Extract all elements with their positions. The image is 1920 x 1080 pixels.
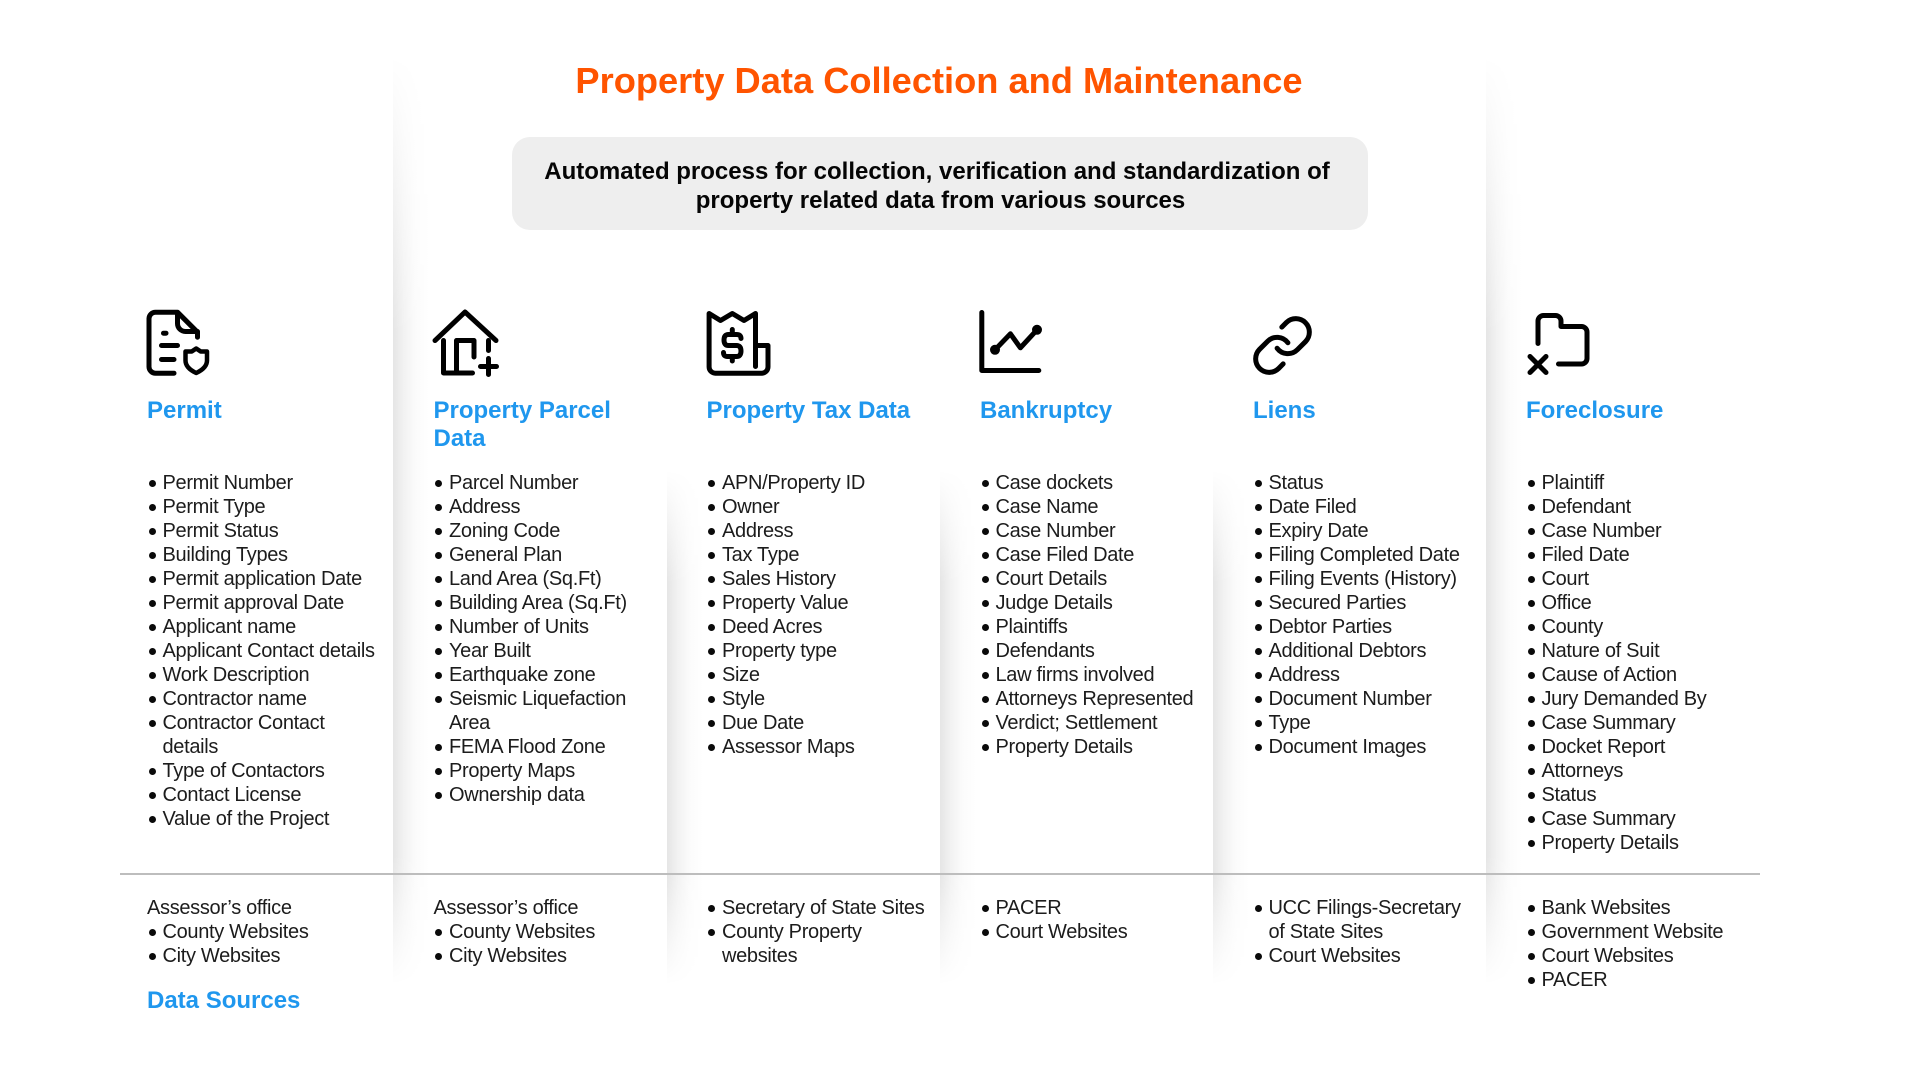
list: bankruptcy fields: Case Number [996,520,1115,542]
list: liens fields: Debtor Parties [1268,616,1392,638]
list: permit fields: Type of Contactors [162,760,325,782]
list: permit sources: City Websites [162,945,280,967]
heading: Bankruptcy [980,397,1112,424]
callout: subtitle: property related data from various sources [696,187,1185,214]
panel: liens [1253,316,1461,967]
heading: Liens [1253,397,1316,424]
list: parcel fields: Zoning Code [449,520,560,542]
list: parcel fields: Property Maps [449,760,575,782]
list: bankruptcy fields [982,472,1193,758]
list: parcel sources [434,897,595,967]
list: liens fields: Expiry Date [1268,520,1368,542]
list: permit fields: Contact License [162,784,301,806]
list: foreclosure fields: Defendant [1542,496,1631,518]
list: tax fields: Size [722,664,760,686]
list: tax fields: Style [722,688,765,710]
list: parcel sources: County Websites [449,921,595,943]
heading [434,397,611,452]
panel: property tax data [706,311,924,967]
list: foreclosure fields: Nature of Suit [1542,640,1659,662]
list: liens fields: Type [1268,712,1311,734]
list: foreclosure fields: Plaintiff [1542,472,1604,494]
list: liens sources: UCC Filings-Secretary [1268,897,1461,919]
list: liens sources: of State Sites [1268,921,1383,943]
list: tax fields: Tax Type [722,544,799,566]
list: parcel fields: Land Area (Sq.Ft) [449,568,601,590]
list: parcel fields: Ownership data [449,784,585,806]
list: bankruptcy fields: Law firms involved [996,664,1154,686]
panel: bankruptcy [979,310,1193,943]
list: bankruptcy sources: Court Websites [996,921,1127,943]
list: bankruptcy fields: Case Filed Date [996,544,1134,566]
list: tax sources: Secretary of State Sites [722,897,924,919]
list: liens fields: Date Filed [1268,496,1356,518]
list: permit fields: Permit Type [162,496,265,518]
heading: Property Parcel [434,397,611,424]
list: tax sources: County Property [722,921,862,943]
icon: house with plus [432,309,499,377]
list: permit fields: Permit application Date [162,568,362,590]
list: foreclosure fields: County [1542,616,1603,638]
panel: foreclosure [1526,313,1723,991]
list: tax fields: Address [722,520,793,542]
heading: Permit [147,397,222,424]
list: foreclosure fields: Status [1542,784,1596,806]
list: tax fields: Due Date [722,712,804,734]
list: permit fields: Work Description [162,664,309,686]
list: parcel fields: Area [449,712,490,734]
list: foreclosure fields: Case Summary [1542,808,1675,830]
list: tax sources: websites [722,945,797,967]
list: tax fields: APN/Property ID [722,472,865,494]
list: permit sources [147,897,309,967]
list: permit fields [149,472,375,830]
list: bankruptcy fields: Attorneys Represented [996,688,1193,710]
list: foreclosure sources: Bank Websites [1542,897,1670,919]
list: permit fields: Building Types [162,544,288,566]
list: liens fields: Secured Parties [1268,592,1406,614]
heading: Foreclosure [1526,397,1663,424]
list: parcel fields: FEMA Flood Zone [449,736,605,758]
list: liens fields: Address [1268,664,1340,686]
list: permit fields: Permit Number [162,472,293,494]
list: liens fields: Filing Events (History) [1268,568,1457,590]
list: bankruptcy fields: Property Details [996,736,1133,758]
list: bankruptcy fields: Defendants [996,640,1095,662]
list: bankruptcy fields: Plaintiffs [996,616,1068,638]
list: bankruptcy fields: Verdict; Settlement [996,712,1157,734]
list: tax fields: Owner [722,496,779,518]
list: parcel sources: City Websites [449,945,567,967]
list: parcel fields: Year Built [449,640,531,662]
callout: subtitle [512,137,1368,230]
list: parcel fields: Address [449,496,520,518]
list: foreclosure fields: Court [1542,568,1589,590]
title: Property Data Collection and Maintenance [575,60,1303,101]
list: parcel fields: General Plan [449,544,562,566]
list: foreclosure fields [1528,472,1707,854]
list: parcel sources: Assessor’s office [434,897,578,919]
list: foreclosure sources [1528,897,1723,991]
list: tax sources [708,897,924,967]
list: liens fields: Document Images [1268,736,1426,758]
list: permit fields: Permit approval Date [162,592,344,614]
list: permit fields: Contractor name [162,688,307,710]
list: foreclosure fields: Jury Demanded By [1542,688,1706,710]
list: permit fields: Contractor Contact [162,712,325,734]
list: bankruptcy fields: Court Details [996,568,1107,590]
list: foreclosure fields: Office [1542,592,1591,614]
list: liens fields: Filing Completed Date [1268,544,1460,566]
list: permit sources: Assessor’s office [147,897,292,919]
icon: folder with x [1528,313,1590,375]
list: liens fields: Additional Debtors [1268,640,1426,662]
list: liens fields [1255,472,1460,758]
list: parcel fields: Number of Units [449,616,589,638]
list: foreclosure fields: Case Number [1542,520,1661,542]
list: permit fields: Permit Status [162,520,278,542]
list: permit fields: Applicant Contact details [162,640,375,662]
list: foreclosure fields: Docket Report [1542,736,1665,758]
list: bankruptcy sources [982,897,1127,943]
list: foreclosure sources: Court Websites [1542,945,1673,967]
heading: data sources: Data Sources [147,987,300,1014]
list: liens fields: Document Number [1268,688,1432,710]
list: bankruptcy fields: Case Name [996,496,1098,518]
list: tax fields: Sales History [722,568,836,590]
list: tax fields: Assessor Maps [722,736,855,758]
list: bankruptcy fields: Judge Details [996,592,1113,614]
icon: line chart [979,310,1042,373]
list: foreclosure sources: PACER [1542,969,1607,991]
list: foreclosure fields: Attorneys [1542,760,1623,782]
list: parcel fields: Parcel Number [449,472,578,494]
list: parcel fields: Building Area (Sq.Ft) [449,592,627,614]
callout: subtitle: Automated process for collection, verification and standardization of [544,158,1330,184]
panel: property parcel data [432,309,627,967]
list: permit fields: details [162,736,218,758]
list: liens fields: Status [1268,472,1323,494]
icon: tax receipt [706,311,770,376]
list: tax fields [708,472,865,758]
list: tax fields: Property type [722,640,837,662]
icon: chain link [1253,316,1312,375]
list: parcel fields: Earthquake zone [449,664,595,686]
heading: Data [434,425,486,452]
list: liens sources: Court Websites [1268,945,1400,967]
list: foreclosure fields: Case Summary [1542,712,1675,734]
list: foreclosure fields: Cause of Action [1542,664,1677,686]
list: foreclosure fields: Filed Date [1542,544,1629,566]
list: permit fields: Applicant name [162,616,296,638]
list: foreclosure fields: Property Details [1542,832,1679,854]
heading: Property Tax Data [706,397,910,424]
list: permit sources: County Websites [162,921,309,943]
list: foreclosure sources: Government Website [1542,921,1723,943]
list: bankruptcy sources: PACER [996,897,1061,919]
list: tax fields: Property Value [722,592,848,614]
list: parcel fields: Seismic Liquefaction [449,688,626,710]
list: bankruptcy fields: Case dockets [996,472,1113,494]
list: parcel fields [435,472,627,806]
list: tax fields: Deed Acres [722,616,822,638]
icon: document with shield [146,310,210,376]
list: liens sources [1255,897,1461,967]
list: permit fields: Value of the Project [162,808,329,830]
panel: permit [146,310,375,967]
